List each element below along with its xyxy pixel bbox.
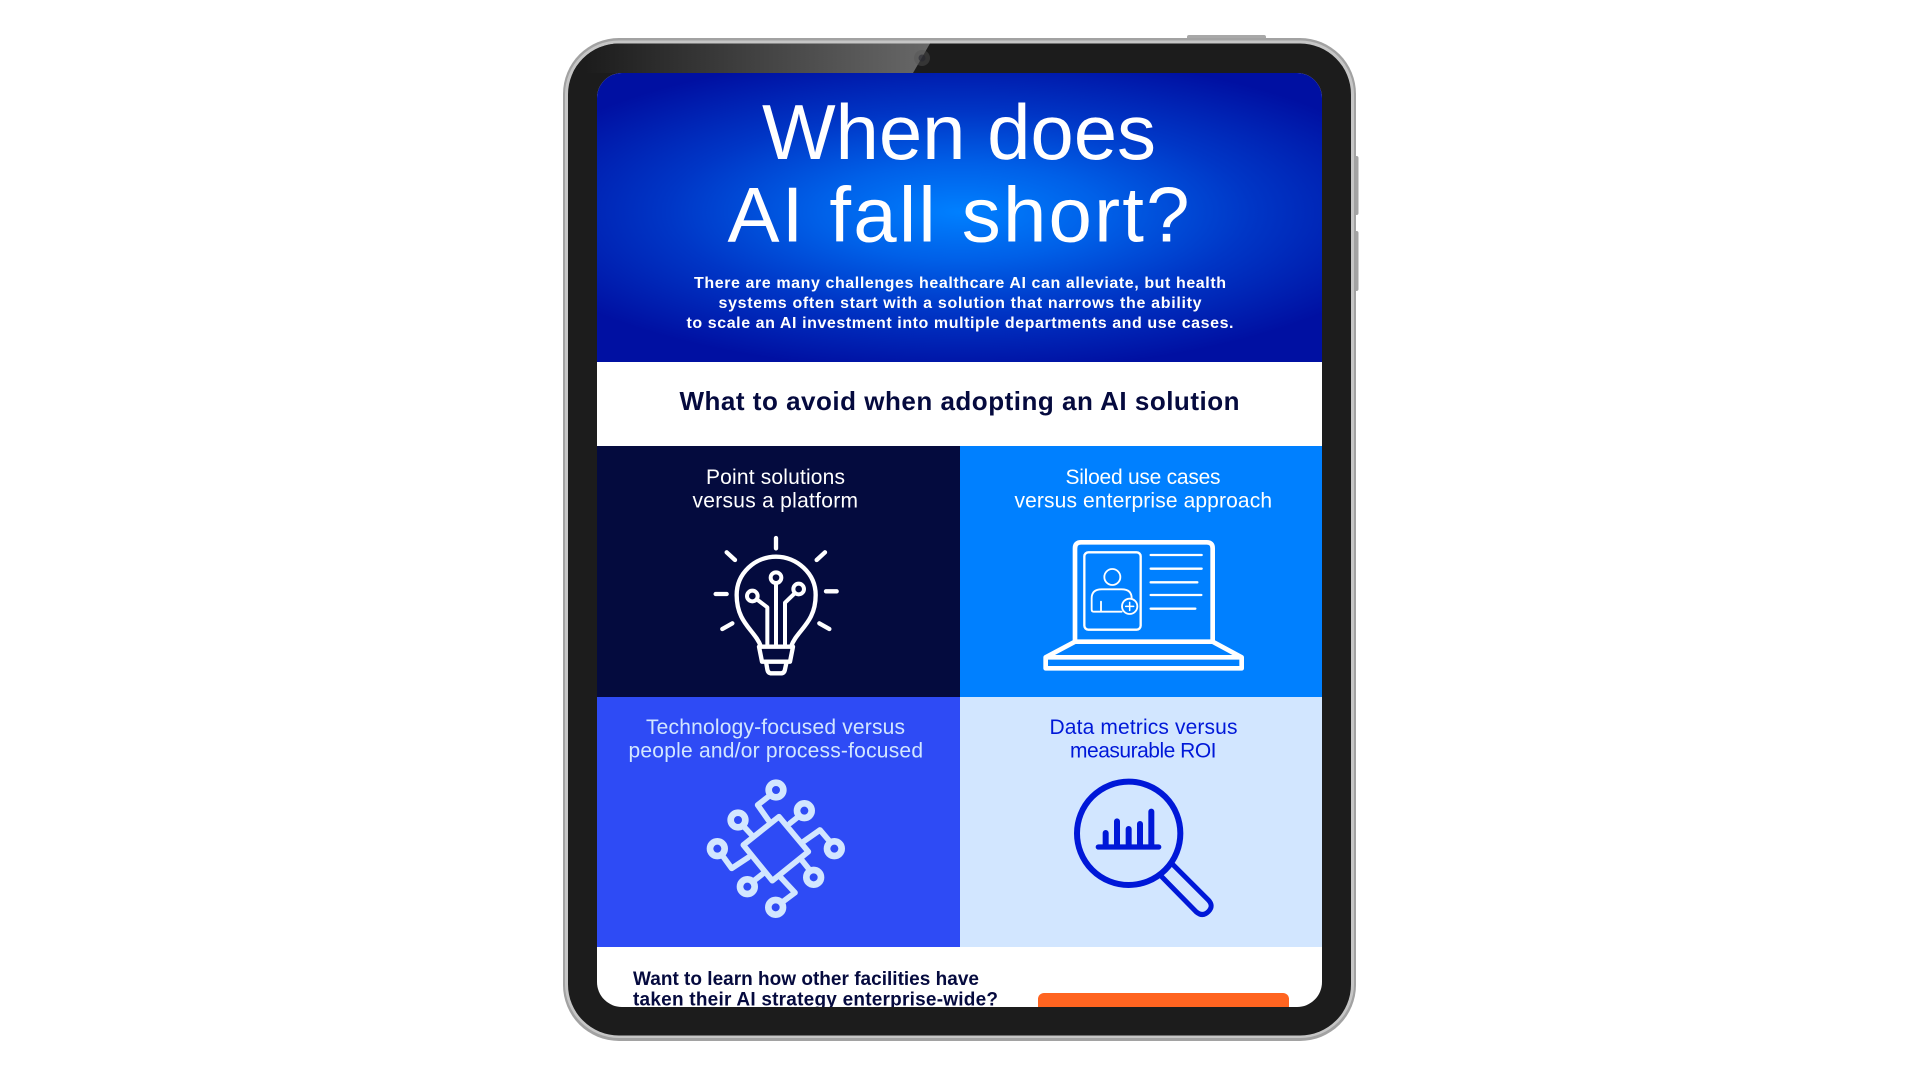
panel: data metrics [960, 697, 1322, 947]
side volume up button [1352, 156, 1358, 215]
icon: microchip with circuits [710, 783, 842, 915]
panel background [960, 697, 1322, 947]
heading band [597, 362, 1322, 446]
icon: light bulb with circuit [716, 538, 837, 673]
screen background [597, 73, 1322, 1007]
black bezel [568, 44, 1351, 1036]
panel background [960, 446, 1322, 697]
title [728, 102, 1187, 242]
panel label: people and/or process-focused [628, 740, 923, 762]
panel label [1014, 466, 1272, 512]
panel label: Data metrics versus [1050, 716, 1238, 739]
call to action text: taken their AI strategy enterprise-wide? [633, 990, 998, 1010]
heading text: What to avoid when adopting an AI solution [680, 386, 1240, 416]
inner rim highlight [565, 40, 1354, 1038]
panel: header [597, 73, 1322, 362]
call to action text: Want to learn how other facilities have [633, 969, 979, 990]
panel label [692, 466, 858, 512]
panel label: Siloed use cases [1066, 466, 1220, 489]
screen content [597, 73, 1322, 1033]
panel background [597, 446, 960, 697]
panel label: Point solutions [706, 466, 845, 489]
icon: magnifier over bar chart [1077, 782, 1211, 914]
orange button [1038, 993, 1289, 1007]
bezel glare [568, 44, 930, 73]
panel label: Technology-focused versus [646, 716, 905, 739]
panel: call to action [633, 971, 1289, 1007]
intro text: There are many challenges healthcare AI can alleviate, but health [694, 275, 1226, 292]
panel label: versus a platform [692, 490, 858, 512]
top power button [1187, 35, 1266, 41]
header gradient background [597, 73, 1322, 362]
intro text [686, 275, 1234, 332]
front camera [914, 50, 930, 66]
device: tablet frame [563, 35, 1358, 1041]
panel: siloed use cases [960, 446, 1322, 697]
call to action text [633, 971, 997, 1007]
title: AI fall short? [728, 170, 1190, 258]
panel: point solutions [597, 446, 960, 697]
heading: what to avoid [680, 391, 1238, 416]
panel: technology-focused [597, 697, 960, 947]
panel label: measurable ROI [1070, 740, 1216, 762]
panel background [597, 697, 960, 947]
panel label [1051, 718, 1237, 758]
side volume down button [1352, 231, 1358, 291]
silver outer rim [563, 38, 1356, 1041]
infographic: tablet mockup [563, 35, 1358, 1041]
intro text: to scale an AI investment into multiple departments and use cases. [686, 315, 1234, 332]
panel label: versus enterprise approach [1014, 490, 1272, 512]
intro text: systems often start with a solution that narrows the ability [718, 295, 1202, 312]
panel label [628, 716, 923, 762]
title: When does [762, 88, 1156, 176]
icon: laptop with patient record [1046, 542, 1242, 668]
